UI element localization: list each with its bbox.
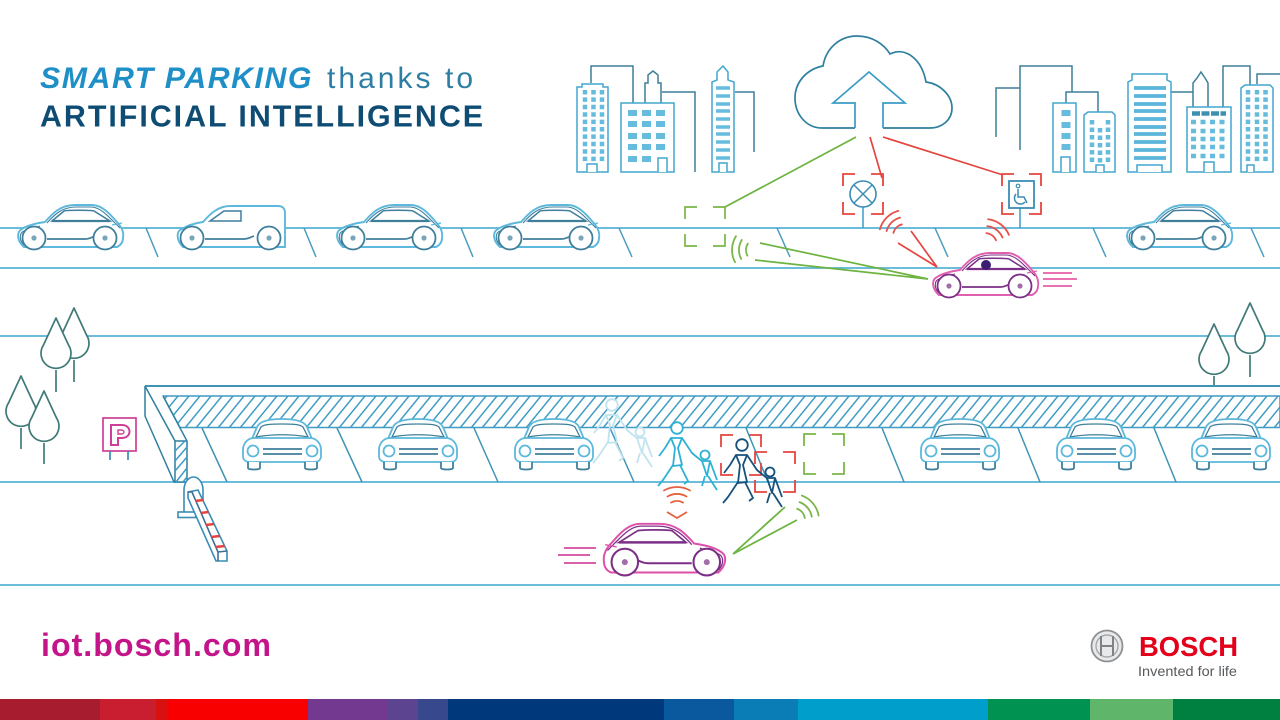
hatched wall: [163, 396, 1280, 428]
website url: iot.bosch.com: [41, 627, 272, 663]
upper parked cars: [18, 205, 1232, 250]
lower pink car: [558, 524, 725, 575]
pedestrians moving across: [593, 399, 782, 507]
car 3: [337, 205, 442, 250]
wave: green: [732, 236, 748, 263]
building: spire block: [621, 71, 674, 172]
family current: [723, 439, 782, 507]
bosch logo: Invented for life: [1138, 663, 1237, 679]
car 1: [18, 205, 123, 250]
wave: green lower: [793, 493, 821, 523]
barrier: [178, 477, 227, 561]
right city skyline: [996, 66, 1280, 172]
family ghost: [593, 399, 652, 467]
title: thanks to: [327, 62, 473, 95]
pedestrian detection brackets: [721, 434, 844, 492]
front car 2: [379, 419, 457, 470]
car 4: [494, 205, 599, 250]
front car 4: [921, 419, 999, 470]
parking sign: [103, 418, 136, 460]
front car 1: [243, 419, 321, 470]
building: tall narrow: [1053, 103, 1076, 172]
free parking space brackets: [685, 207, 725, 246]
armature icon: [1092, 630, 1122, 662]
upper parking stall lines: [146, 228, 1264, 257]
trees left: [6, 308, 89, 464]
colour bar: [0, 699, 1280, 720]
stall lines: [202, 428, 1176, 482]
sensor beams from upper car: [755, 231, 937, 279]
parking garage structure: [145, 386, 1280, 482]
cloud with upload arrow: [795, 36, 952, 128]
entrance wall: [145, 386, 187, 482]
disabled parking sign with brackets: [1002, 174, 1041, 228]
lower sensor signals: [664, 487, 821, 554]
road lines: [0, 228, 1280, 585]
wave: red right: [981, 216, 1011, 245]
building: narrow tower: [712, 66, 734, 172]
building: windows block: [1084, 112, 1115, 172]
building: spire office: [1187, 72, 1231, 172]
sensor waves upper: [732, 208, 1011, 263]
upper pink car: [933, 253, 1077, 298]
title: ARTIFICIAL INTELLIGENCE: [40, 98, 485, 134]
building: left tower: [577, 84, 608, 172]
no parking sign with brackets: [843, 174, 883, 228]
wave: red lower: [664, 487, 690, 503]
front car 6: [1192, 419, 1270, 470]
building: wide stripes: [1128, 74, 1171, 172]
garage front cars: [243, 419, 1270, 470]
trees right: [1199, 303, 1265, 386]
connection lines from cloud: [725, 137, 1003, 207]
driver: [981, 260, 991, 270]
title: [40, 62, 485, 134]
left city skyline: [577, 66, 754, 172]
building: right edge tower: [1241, 85, 1273, 172]
family mid: [658, 422, 717, 490]
speed lines: [558, 548, 596, 563]
bosch logo: [1092, 630, 1238, 679]
bosch logo: BOSCH: [1139, 631, 1238, 662]
van: [178, 206, 285, 250]
roof lines: [145, 385, 1280, 387]
title: SMART PARKING: [40, 62, 313, 95]
front car 5: [1057, 419, 1135, 470]
car 5: [1127, 205, 1232, 250]
speed lines: [1043, 273, 1077, 286]
entrance hatch: [175, 441, 187, 482]
wave: red left: [877, 208, 907, 238]
front car 3: [515, 419, 593, 470]
